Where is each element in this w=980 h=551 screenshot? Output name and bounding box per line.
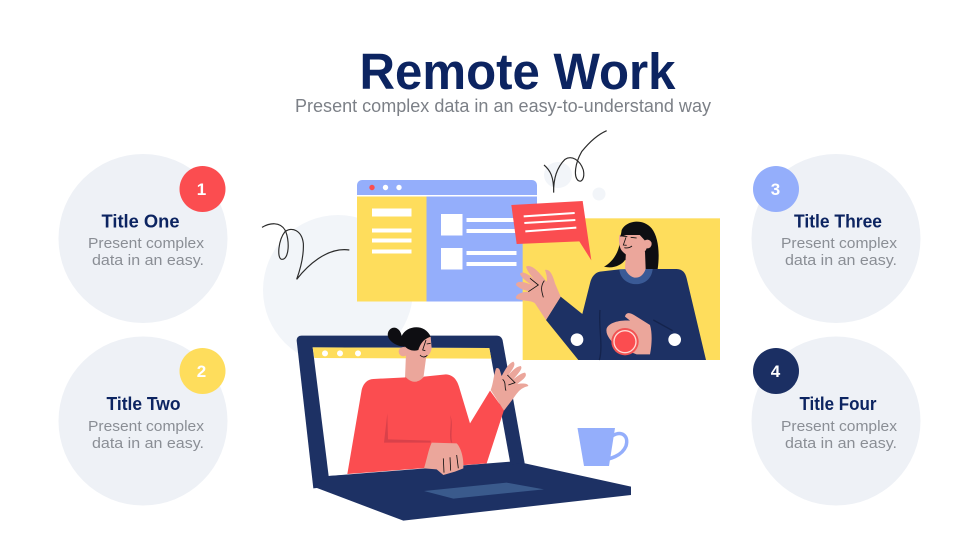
resting hand [424, 443, 463, 475]
panel: title one [58, 154, 228, 323]
text: title four body: data in an easy. [785, 435, 897, 452]
badge 4: 4 [771, 362, 781, 381]
laptop with woman [297, 327, 631, 521]
title: Remote Work [360, 43, 676, 100]
heading: title four: Title Four [800, 394, 876, 414]
laptop keyboard base [313, 463, 631, 521]
panel: title three [752, 154, 920, 323]
text: title three body: data in an easy. [785, 252, 897, 269]
text: title two body: Present complex [88, 418, 205, 435]
badge 4 [753, 348, 799, 394]
heading: title three: Title Three [794, 212, 882, 232]
squiggle left [262, 224, 349, 279]
badge 1 [180, 166, 226, 212]
video call panel: woman with mug [516, 218, 720, 360]
coffee mug [578, 428, 627, 466]
neck and head [405, 353, 427, 382]
laptop screen [297, 336, 525, 488]
waving hand [491, 362, 528, 411]
mug and hand [606, 313, 652, 354]
red sweater [347, 374, 504, 474]
text: title one body: data in an easy. [92, 252, 204, 269]
text: title two body: data in an easy. [92, 435, 204, 452]
heading: title one: Title One [102, 212, 180, 232]
hair back [604, 222, 659, 269]
browser window [357, 180, 537, 302]
collar [619, 269, 653, 284]
cuffs [571, 333, 583, 346]
badge 3 [753, 166, 799, 212]
subtitle: Present complex data in an easy-to-understand way [295, 96, 711, 116]
neck [625, 252, 646, 278]
badge 1: 1 [197, 180, 206, 199]
background blob circle [263, 215, 413, 365]
text: title three body: Present complex [781, 235, 898, 252]
badge 2: 2 [197, 362, 206, 381]
heading: title two: Title Two [106, 394, 180, 414]
badge 2 [180, 348, 226, 394]
face [619, 235, 647, 256]
text: title four body: Present complex [781, 418, 898, 435]
hand raised [516, 266, 561, 320]
squiggle right [544, 131, 607, 193]
text: title one body: Present complex [88, 235, 205, 252]
panel: title two [58, 336, 228, 506]
speech bubble [511, 201, 591, 260]
background small ovals [544, 162, 606, 200]
panel: title four [752, 336, 920, 506]
badge 3: 3 [771, 180, 780, 199]
body [546, 269, 706, 360]
